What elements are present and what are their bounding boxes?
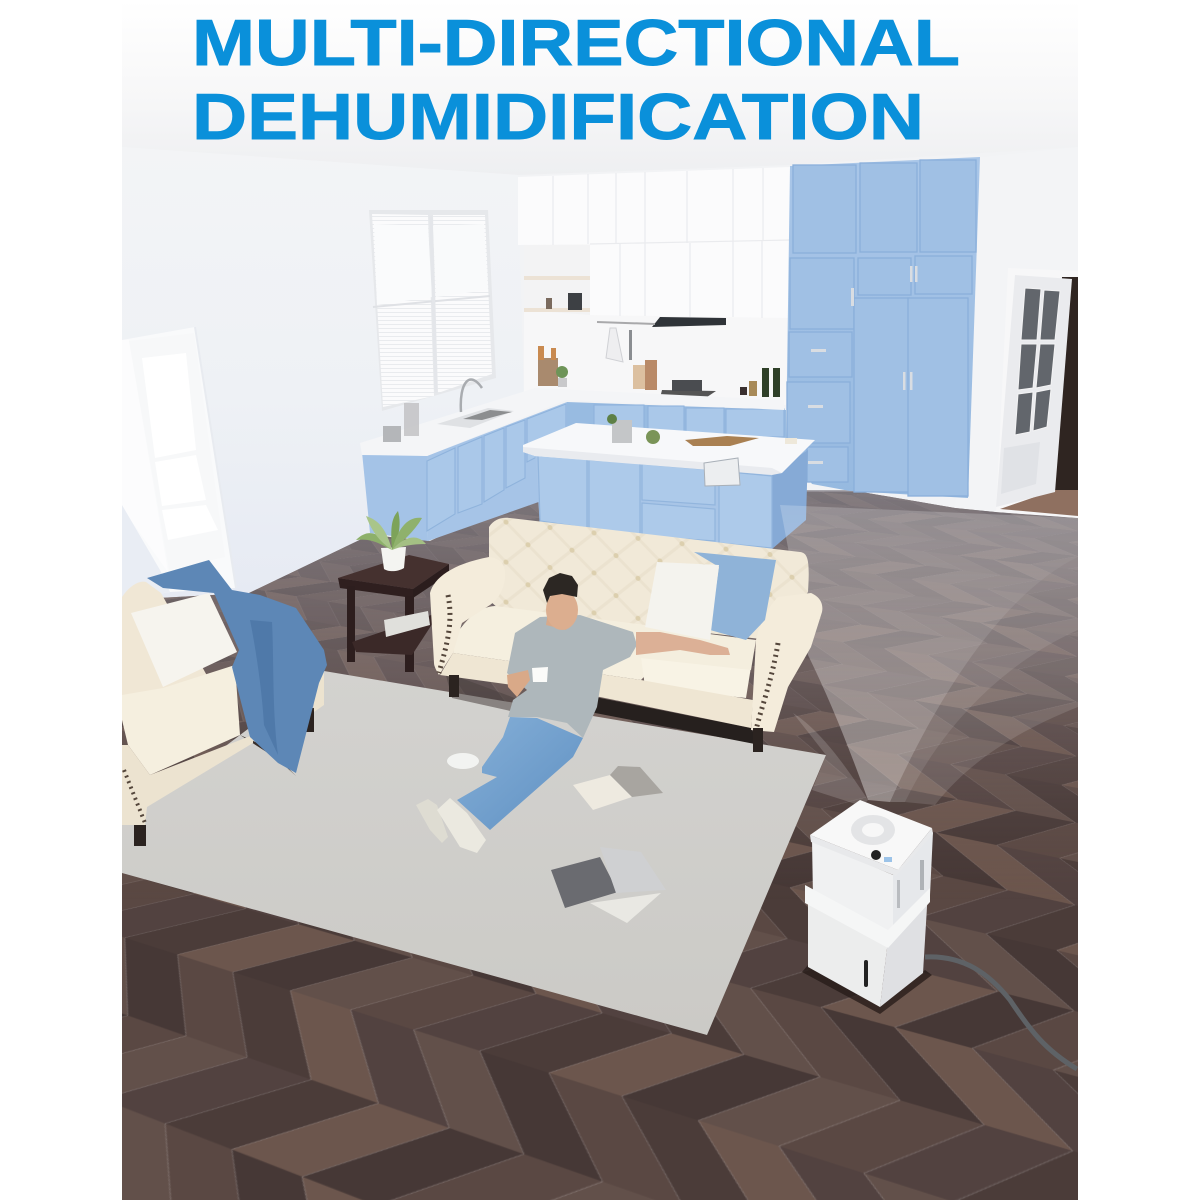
power cord	[925, 957, 1077, 1069]
floor shadow	[802, 965, 932, 1014]
herringbone wood floor in perspective	[122, 492, 1078, 1200]
white pillow	[645, 562, 719, 640]
control knob	[871, 850, 881, 860]
ceiling	[122, 0, 1078, 175]
shoes	[416, 798, 486, 853]
kitchen island	[523, 414, 815, 549]
sofa legs	[449, 675, 459, 697]
main tufted sofa	[430, 518, 822, 752]
upper body	[812, 832, 933, 935]
man sitting on rug	[416, 573, 730, 853]
arm on sofa	[636, 632, 730, 655]
blue pillow	[694, 552, 776, 640]
title line 1: MULTI-DIRECTIONAL	[192, 6, 960, 79]
tall blue pantry cabinets	[786, 157, 980, 498]
top panel	[810, 800, 933, 876]
airflow beams	[780, 505, 1078, 806]
title line 2: DEHUMIDIFICATION	[192, 80, 924, 153]
left sofa	[122, 560, 327, 846]
potted plant	[356, 511, 426, 571]
white upper cabinets	[518, 167, 790, 318]
right doorway with glazed door	[996, 268, 1078, 518]
area rug	[122, 671, 826, 1035]
face	[546, 590, 578, 630]
jars on worktop	[404, 403, 419, 436]
kitchen utensils and backsplash items	[538, 328, 780, 399]
left doorway	[122, 327, 236, 600]
shadow under sofa	[590, 697, 760, 745]
t-shirt	[507, 615, 637, 738]
throw pillow	[131, 593, 237, 687]
range hood	[597, 317, 726, 327]
stacked magazines	[551, 847, 666, 923]
blue blanket	[147, 560, 327, 773]
right wall	[955, 147, 1078, 520]
left sofa seat	[122, 665, 240, 775]
worktop	[360, 388, 784, 456]
side table with plant	[338, 511, 449, 672]
lower tank	[808, 890, 928, 1007]
seat cushions	[453, 606, 660, 680]
jeans	[457, 717, 583, 830]
tank band	[805, 885, 930, 948]
right arm	[751, 593, 822, 732]
wood shelves	[524, 276, 590, 312]
magazines on shelf	[384, 611, 430, 637]
island bucket and plants	[607, 414, 797, 486]
left sofa rail and arm	[122, 735, 253, 825]
nailhead trim	[439, 595, 450, 673]
left arm	[430, 557, 505, 675]
sink and faucet	[437, 408, 514, 428]
L-shaped base cabinets	[360, 380, 786, 541]
floor haze	[122, 490, 1078, 900]
left sofa back	[122, 582, 215, 705]
front rail	[440, 653, 753, 728]
neck	[546, 612, 572, 630]
fan grille	[851, 815, 895, 845]
left wall	[122, 147, 524, 600]
sofa back	[489, 518, 809, 640]
dehumidifier	[802, 800, 1077, 1069]
forearm and hand	[507, 670, 530, 697]
hair	[543, 573, 578, 603]
kitchen back wall and shelves	[524, 240, 790, 405]
open magazine	[573, 766, 663, 810]
coffee cup	[532, 667, 548, 682]
saucer	[447, 753, 479, 769]
window with blinds	[369, 210, 496, 411]
title	[192, 6, 960, 153]
left sofa shadow	[240, 735, 296, 776]
